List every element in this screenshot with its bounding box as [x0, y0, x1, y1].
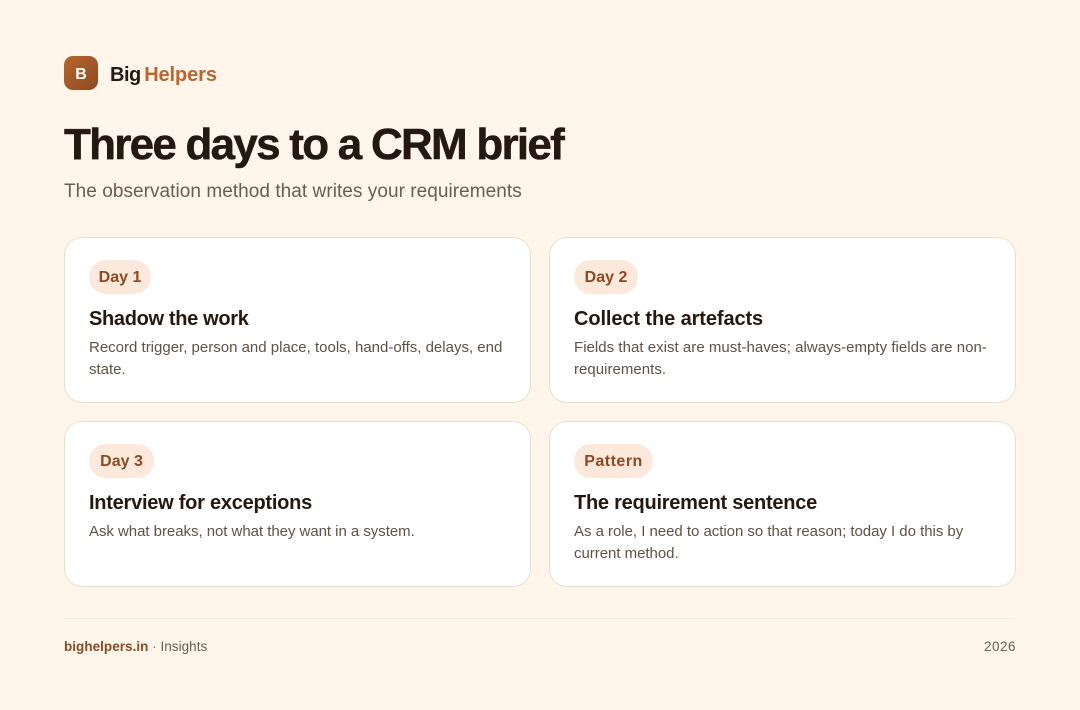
heading: interview for exceptions: Interview for exceptions	[89, 492, 312, 514]
footer source: bighelpers.in · Insights	[64, 639, 207, 654]
text: day 2	[574, 339, 987, 378]
badge: day 2: Day 2	[585, 269, 627, 286]
badge: pattern	[574, 444, 653, 478]
panel: pattern	[549, 421, 1016, 587]
brand name: Big Helpers	[110, 64, 217, 86]
badge: day 3: Day 3	[100, 453, 143, 470]
badge: day 1	[89, 260, 151, 294]
text: pattern	[574, 523, 964, 562]
heading: the requirement sentence: The requirement sentence	[574, 492, 817, 514]
subtitle: The observation method that writes your requirements	[64, 181, 522, 202]
badge: day 3	[89, 444, 154, 478]
icon: logo mark: B	[75, 66, 87, 83]
icon: logo mark	[64, 56, 98, 90]
badge: day 2	[574, 260, 638, 294]
text: day 3: Ask what breaks, not what they want in a system.	[89, 523, 415, 540]
logo	[64, 56, 217, 90]
badge: day 1: Day 1	[99, 269, 141, 286]
text: day 2: Fields that exist are must-haves; always-empty fields are non-	[574, 339, 987, 356]
text: day 1	[89, 339, 502, 378]
footer year: 2026	[984, 639, 1016, 654]
heading: collect the artefacts: Collect the artefacts	[574, 308, 763, 330]
text: day 1: Record trigger, person and place, tools, hand-offs, delays, end	[89, 339, 502, 356]
title: Three days to a CRM brief	[64, 120, 563, 169]
heading: shadow the work: Shadow the work	[89, 308, 249, 330]
text: day 1: state.	[89, 361, 126, 378]
panel: day 2	[549, 237, 1016, 403]
text: pattern: As a role, I need to action so that reason; today I do this by	[574, 523, 963, 540]
panel: day 3	[64, 421, 531, 587]
badge: pattern: Pattern	[584, 453, 643, 470]
text: pattern: current method.	[574, 545, 679, 562]
panel: day 1	[64, 237, 531, 403]
text: day 2: requirements.	[574, 361, 666, 378]
